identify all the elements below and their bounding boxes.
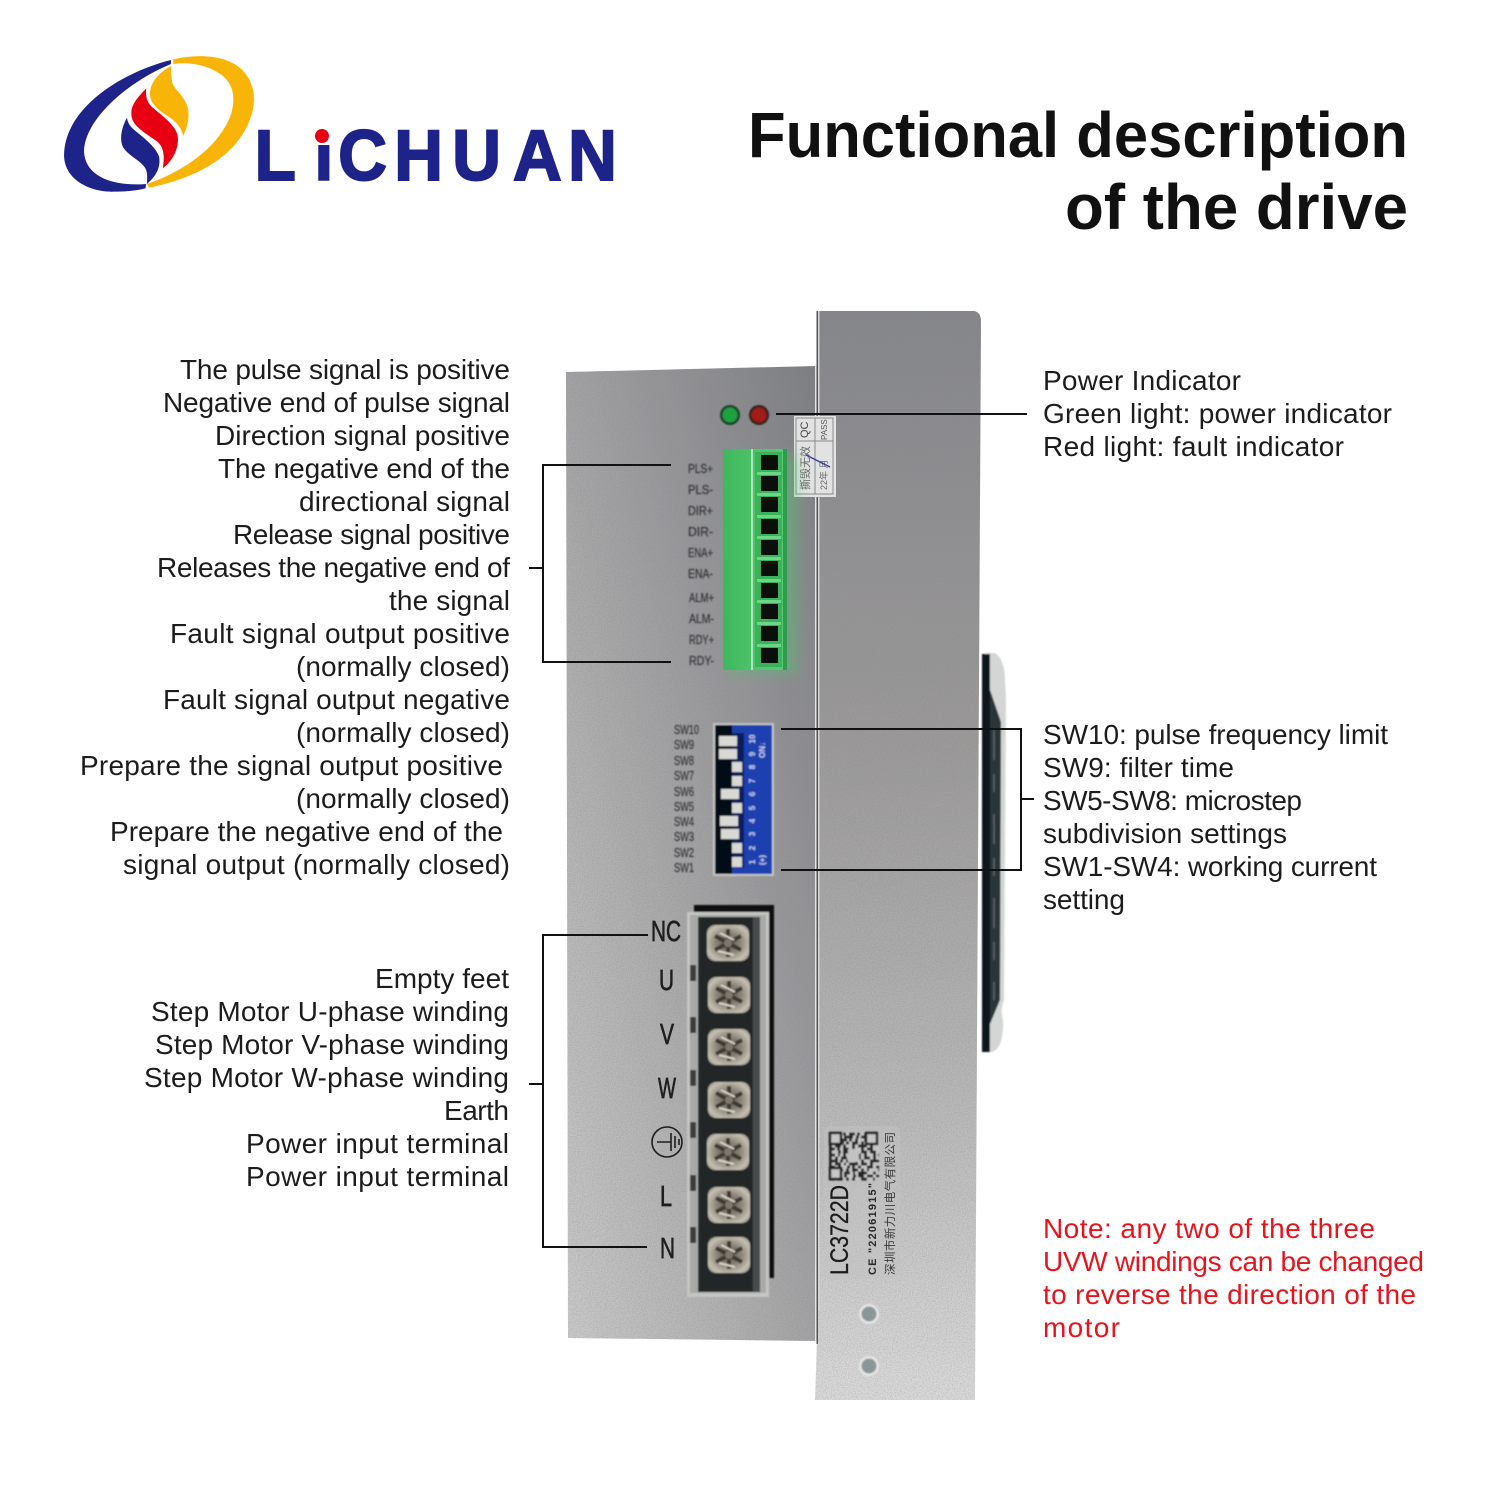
text block: signal terminal descriptions: directional signal (299, 486, 510, 517)
QR code (829, 1132, 879, 1180)
text block: signal terminal descriptions: signal output (normally closed) (123, 849, 510, 880)
text block: signal terminal descriptions: Direction signal positive (215, 420, 510, 451)
callout: wiring note: Note: any two of the three (1043, 1213, 1375, 1244)
terminal labels: V (660, 1019, 674, 1051)
text block: power indicator (1043, 365, 1392, 462)
DIP switch labels: SW2 (674, 846, 694, 860)
terminal labels: L (660, 1181, 672, 1213)
connector pin labels: ALM+ (689, 591, 714, 605)
connector pin labels: ENA+ (688, 546, 713, 560)
text block: signal terminal descriptions: (normally closed) (296, 717, 510, 748)
text block: signal terminal descriptions: Fault signal output negative (163, 684, 510, 715)
logo emblem: swoosh ring and flames (64, 56, 254, 192)
text block: signal terminal descriptions: Fault signal output positive (170, 618, 510, 649)
text block: power indicator: Red light: fault indicator (1043, 431, 1344, 462)
DIP switch: 1 (748, 859, 757, 864)
DIP switch: 5 (748, 805, 757, 810)
text block: power terminal descriptions: Step Motor U-phase winding (151, 996, 509, 1027)
text block: DIP switch settings: setting (1043, 884, 1125, 915)
text block: power terminal descriptions: Step Motor V-phase winding (155, 1029, 509, 1060)
text block: signal terminal descriptions: the signal (389, 585, 510, 616)
connector pin labels: DIR+ (688, 504, 713, 518)
product label: QR, model, barcode (824, 1126, 900, 1279)
text block: DIP switch settings: subdivision settings (1043, 818, 1287, 849)
terminal labels: NC (651, 916, 681, 948)
DIP switch labels: SW6 (674, 785, 694, 799)
DIP switch: ON↓ (758, 742, 767, 758)
connector pin labels (688, 462, 714, 668)
title: Functional description (748, 99, 1408, 171)
text block: DIP switch settings (1043, 719, 1388, 915)
drive unit photo (566, 311, 1006, 1400)
QC sticker: 22年 月 (818, 459, 829, 490)
text block: signal terminal descriptions: (normally closed) (296, 783, 510, 814)
terminal labels (651, 916, 681, 1265)
text block: power terminal descriptions: Power input terminal (246, 1128, 509, 1159)
DIN rail clip on the back (982, 653, 1006, 1052)
leader: power terminal bracket (529, 935, 648, 1247)
power terminal block (687, 905, 774, 1297)
company name: 深圳市新力川电气有限公司 (883, 1132, 897, 1275)
DIP switch: 7 (748, 778, 757, 783)
DIP switch labels: SW7 (674, 769, 694, 783)
text block: power terminal descriptions (144, 963, 509, 1192)
leader: power indicator (776, 413, 1027, 415)
DIP switch: 4 (748, 818, 757, 823)
terminal labels: U (659, 965, 674, 997)
mounting holes (859, 1304, 879, 1376)
DIP switch labels: SW4 (674, 815, 694, 829)
callout: wiring note: motor (1043, 1312, 1120, 1343)
model number: LC3722D (826, 1185, 854, 1275)
green signal connector (723, 449, 798, 675)
connector pin labels: PLS+ (688, 462, 713, 476)
QC sticker: PASS (820, 419, 829, 440)
QC sticker (794, 416, 836, 497)
connector pin labels: RDY+ (689, 633, 714, 647)
LED indicators (720, 405, 769, 425)
text block: signal terminal descriptions (80, 354, 510, 880)
barcode (852, 1184, 862, 1275)
text block: signal terminal descriptions: Prepare the negative end of the (110, 816, 503, 847)
text block: signal terminal descriptions: Negative end of pulse signal (163, 387, 510, 418)
callout: wiring note: UVW windings can be changed (1043, 1246, 1424, 1277)
leader: DIP switch bracket (781, 729, 1034, 870)
text block: DIP switch settings: SW9: filter time (1043, 752, 1234, 783)
DIP switch: 2 (748, 845, 757, 850)
text block: DIP switch settings: SW5-SW8: microstep (1043, 785, 1302, 816)
DIP switch: 9 (748, 751, 757, 756)
text block: power terminal descriptions: Earth (444, 1095, 509, 1126)
DIP switch labels: SW3 (674, 830, 694, 844)
callout: wiring note: to reverse the direction of the (1043, 1279, 1416, 1310)
panel fold seam (815, 311, 820, 1344)
front panel (566, 366, 817, 1341)
logo wordmark: LiCHUAN (255, 115, 617, 195)
DIP switch labels: SW8 (674, 754, 694, 768)
leader: signal connector bracket (529, 465, 671, 662)
connector pin labels: ENA- (688, 567, 713, 581)
DIP switch: 6 (748, 791, 757, 796)
text block: signal terminal descriptions: The negative end of the (218, 453, 510, 484)
callout: wiring note (1043, 1213, 1424, 1343)
logo: Lichuan (64, 56, 617, 195)
terminal labels: W (658, 1073, 676, 1105)
connector pin labels: DIR- (688, 525, 713, 539)
DIP switch labels: SW1 (674, 861, 694, 875)
title: of the drive (1065, 171, 1408, 243)
connector pin labels: PLS- (688, 483, 713, 497)
side plate (815, 311, 981, 1400)
serial number: CE "22061915" (867, 1183, 879, 1275)
text block: power terminal descriptions: Power input terminal (246, 1161, 509, 1192)
terminal labels: N (660, 1233, 675, 1265)
connector pin labels: ALM- (689, 612, 714, 626)
DIP switch labels: SW9 (674, 738, 694, 752)
DIP switch: (+) (758, 855, 767, 865)
DIP switch (713, 723, 774, 876)
QC sticker: QC (799, 421, 811, 438)
QC sticker: 撕毁无效 (798, 446, 812, 490)
DIP switch labels: SW5 (674, 800, 694, 814)
DIP switch labels (674, 723, 699, 875)
text block: power indicator: Green light: power indicator (1043, 398, 1392, 429)
text block: signal terminal descriptions: (normally closed) (296, 651, 510, 682)
text block: signal terminal descriptions: Release signal positive (233, 519, 510, 550)
DIP switch: 8 (748, 764, 757, 769)
DIP switch: 3 (748, 831, 757, 836)
connector pin labels: RDY- (689, 654, 714, 668)
title (748, 99, 1408, 243)
DIP switch: 10 (748, 734, 757, 743)
DIP switch labels: SW10 (674, 723, 699, 737)
text block: signal terminal descriptions: Releases the negative end of (157, 552, 510, 583)
icon: earth symbol (652, 1127, 682, 1157)
text block: signal terminal descriptions: The pulse signal is positive (180, 354, 510, 385)
text block: DIP switch settings: SW1-SW4: working current (1043, 851, 1377, 882)
text block: DIP switch settings: SW10: pulse frequency limit (1043, 719, 1388, 750)
text block: power indicator: Power Indicator (1043, 365, 1241, 396)
text block: power terminal descriptions: Empty feet (375, 963, 509, 994)
text block: signal terminal descriptions: Prepare the signal output positive (80, 750, 503, 781)
text block: power terminal descriptions: Step Motor W-phase winding (144, 1062, 509, 1093)
